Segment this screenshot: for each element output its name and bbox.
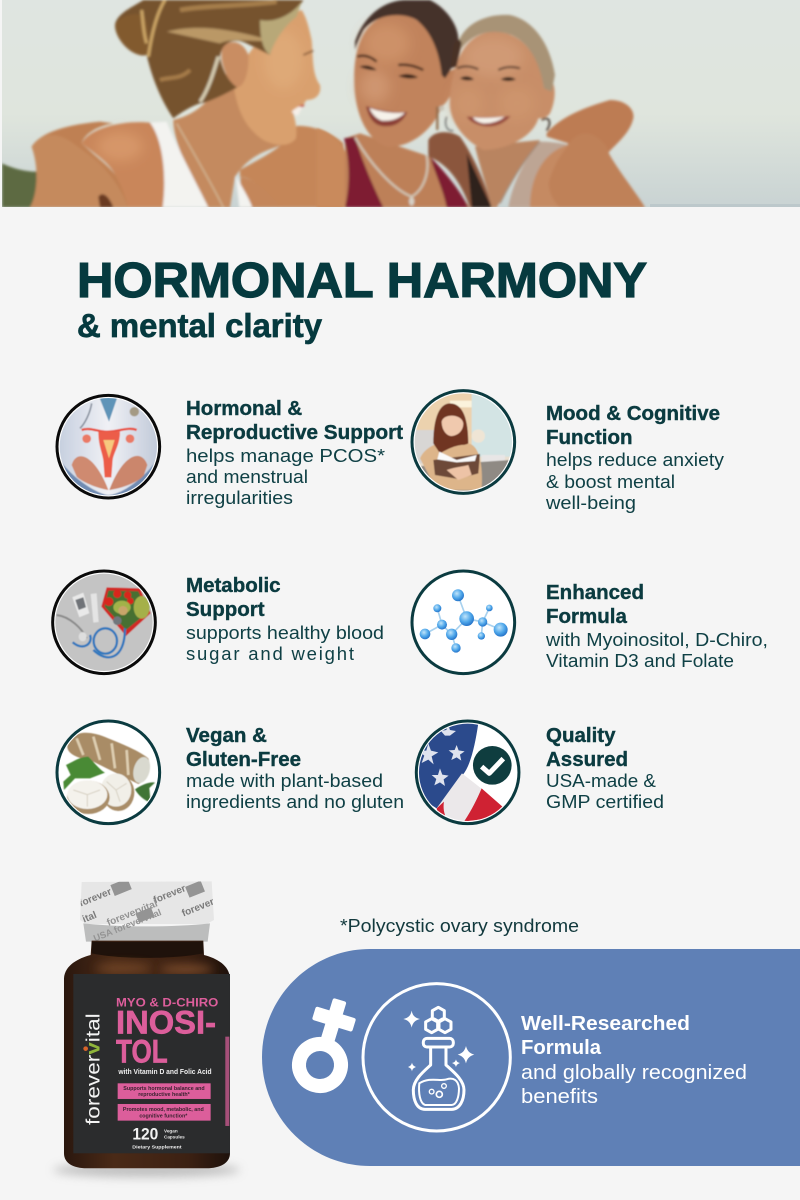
bottle cap: forever: [152, 883, 188, 906]
woman on the left: [2, 0, 343, 207]
product label: with Vitamin D and Folic Acid: [117, 1067, 212, 1076]
feature: metabolic support: sugar and weight: [186, 643, 354, 664]
hero photo: three smiling women: [2, 0, 800, 207]
panel: well-researched formula: [262, 949, 800, 1166]
feature: hormonal and reproductive support: and menstrual: [186, 466, 308, 487]
feature: quality assured: USA-made &: [546, 770, 657, 791]
bottle cap: forevervital: [105, 898, 160, 929]
product label: MYO & D-CHIRO: [116, 996, 218, 1010]
panel text: Formula: [521, 1037, 602, 1059]
title: HORMONAL HARMONY: [77, 254, 647, 308]
icon: American flag with check mark: [413, 721, 519, 824]
feature: mood and cognitive function: helps reduce anxiety: [546, 449, 725, 470]
icon: glucose meter, stethoscope and healthy food: [53, 571, 157, 675]
icon: inositol root and slices: [57, 721, 160, 824]
feature: mood and cognitive function: & boost mental: [546, 471, 675, 492]
feature: hormonal and reproductive support: Hormonal &: [186, 397, 302, 420]
product bottle: [53, 878, 240, 1177]
product label: Vegan: [164, 1129, 178, 1134]
feature: mood and cognitive function: well-being: [545, 492, 636, 513]
product label: forevervital: [83, 1013, 104, 1125]
bottle cap: [80, 882, 214, 942]
product label: 120: [132, 1124, 158, 1143]
feature: quality assured: Quality: [546, 724, 616, 747]
feature: quality assured: GMP certified: [546, 791, 664, 812]
panel text: [521, 1013, 747, 1108]
feature: mood and cognitive function: Function: [546, 426, 633, 449]
product label: cognitive function*: [139, 1113, 188, 1119]
panel text: Well-Researched: [521, 1013, 690, 1035]
feature: quality assured: [546, 724, 664, 812]
feature: enhanced formula: Enhanced: [546, 581, 644, 604]
product label: [73, 974, 230, 1153]
feature: metabolic support: Metabolic: [186, 574, 281, 597]
feature: vegan and gluten-free: [186, 724, 404, 812]
feature: enhanced formula: [545, 581, 768, 671]
feature: metabolic support: Support: [186, 598, 265, 621]
feature: mood and cognitive function: Mood & Cognitive: [546, 402, 720, 425]
footnote: *Polycystic ovary syndrome: [340, 915, 579, 936]
feature: enhanced formula: with Myoinositol, D-Chiro,: [545, 629, 768, 650]
icon: flask in circle: [363, 984, 510, 1131]
feature: metabolic support: supports healthy blood: [186, 622, 384, 643]
feature: metabolic support: [186, 574, 384, 664]
bottle cap: forever: [180, 897, 216, 919]
product label: Supports hormonal balance and: [123, 1086, 205, 1092]
icon: woman reading a book: [412, 391, 515, 493]
icon: female symbol: [294, 994, 360, 1091]
panel text: benefits: [521, 1085, 598, 1108]
feature: hormonal and reproductive support: helps manage PCOS*: [186, 445, 385, 466]
product label: reproductive health*: [138, 1092, 191, 1098]
women in the centre and on the right: [317, 0, 645, 207]
feature: vegan and gluten-free: Gluten-Free: [186, 748, 301, 771]
feature: enhanced formula: Vitamin D3 and Folate: [546, 650, 734, 671]
feature: vegan and gluten-free: Vegan &: [186, 724, 267, 747]
bottle cap: USA forevervital: [92, 907, 163, 944]
feature: mood and cognitive function: [545, 402, 725, 513]
feature: hormonal and reproductive support: [186, 397, 403, 508]
subtitle: & mental clarity: [77, 307, 323, 344]
title: [77, 254, 647, 344]
feature: hormonal and reproductive support: irregularities: [186, 487, 293, 508]
product label: INOSI-: [116, 1005, 216, 1041]
icon: doctor holding uterus: [57, 395, 160, 498]
feature: enhanced formula: Formula: [546, 605, 627, 628]
feature: vegan and gluten-free: ingredients and no gluten: [186, 791, 404, 812]
product label: Promotes mood, metabolic, and: [123, 1107, 204, 1113]
product label: Capsules: [164, 1135, 185, 1140]
bottle cap: forever: [78, 887, 113, 909]
bottle cap: ital: [81, 910, 99, 925]
icon: molecule: [412, 571, 515, 674]
panel text: and globally recognized: [521, 1061, 747, 1084]
glass jar: [64, 941, 230, 1168]
product label: TOL: [116, 1033, 168, 1069]
product label: Dietary Supplement: [132, 1144, 182, 1150]
feature: hormonal and reproductive support: Reproductive Support: [186, 421, 403, 444]
feature: quality assured: Assured: [546, 748, 628, 771]
feature: vegan and gluten-free: made with plant-based: [186, 770, 383, 791]
